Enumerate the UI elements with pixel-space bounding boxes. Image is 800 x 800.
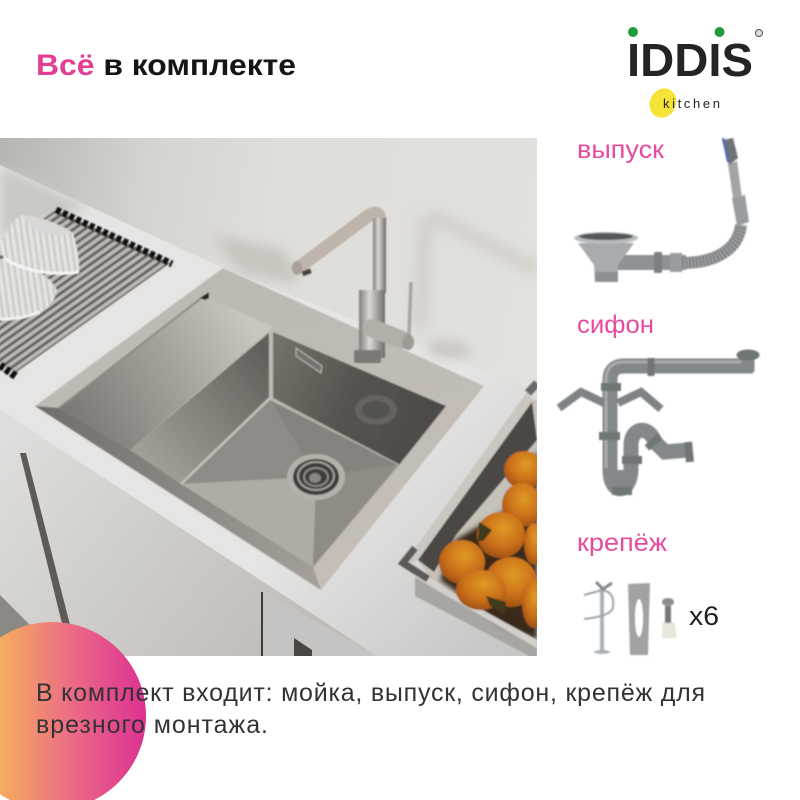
label: крепёж: крепёж: [577, 529, 667, 557]
fruit shadow: [440, 450, 537, 640]
label: x6: x6: [689, 601, 719, 631]
icon: siphon: [559, 351, 758, 495]
white bowls: [0, 215, 79, 320]
description text: В комплект входит: мойка, выпуск, сифон, крепёж для: [36, 679, 705, 707]
persimmons: [439, 451, 546, 628]
logo: IDDIS kitchen: [627, 27, 762, 122]
bowl left wall: [130, 332, 270, 484]
label: сифон: сифон: [577, 311, 654, 339]
soap reflection: [355, 395, 397, 425]
icon: sink outlet: [574, 138, 749, 282]
kitchen photo: [0, 138, 546, 660]
drying mat: [0, 210, 172, 377]
logo: IDDIS kitchen: IDDIS: [627, 34, 753, 86]
bowl floor facets: [270, 400, 399, 477]
gradient circle: [0, 622, 146, 800]
label: выпуск: выпуск: [577, 136, 665, 164]
countertop: [0, 165, 537, 656]
tray interior: [418, 400, 537, 640]
icon: screw with anchor: [662, 598, 676, 638]
tray corner clips: [403, 548, 428, 579]
sink deck: [35, 268, 484, 590]
bowl right wall: [313, 406, 446, 567]
tray rim: [404, 392, 533, 564]
title: Всё в комплекте: [36, 49, 296, 82]
bowl back wall: [273, 332, 446, 465]
brand plate: [296, 348, 322, 373]
bowl seams: [269, 332, 271, 398]
stainless steel sink: [35, 268, 484, 590]
description text: врезного монтажа.: [36, 711, 268, 739]
faucet: [292, 213, 414, 363]
icon: mounting plate: [628, 583, 650, 655]
logo: IDDIS kitchen: kitchen: [663, 96, 720, 111]
wall shadows: [212, 218, 537, 358]
icon: mounting clip: [584, 582, 613, 654]
tray front face: [415, 576, 537, 660]
cabinet fronts: [0, 410, 377, 656]
wall: [0, 138, 537, 438]
drainboard: [59, 296, 273, 450]
description text: [36, 679, 705, 739]
drain strainer: [287, 454, 345, 500]
fruit tray: [403, 383, 546, 660]
